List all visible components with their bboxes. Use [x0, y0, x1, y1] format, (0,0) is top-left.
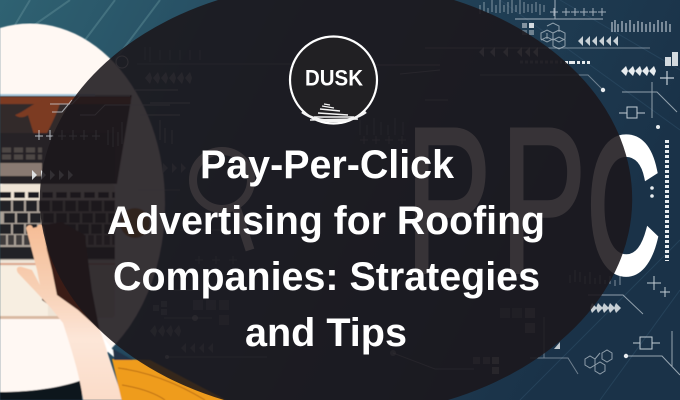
plus row upper left	[35, 130, 100, 140]
large PPC letters	[405, 84, 659, 319]
hexagons lower right	[585, 350, 612, 374]
chip top right	[619, 107, 645, 118]
hexagons	[541, 23, 565, 49]
dark lower corner	[0, 380, 82, 400]
title: and Tips	[245, 311, 407, 355]
logo: DUSK	[290, 36, 377, 124]
coffee cup	[120, 208, 150, 238]
plus row lower middle	[195, 256, 237, 264]
equaliser bars top right	[612, 20, 670, 32]
title: Pay-Per-Click	[200, 143, 454, 187]
shadowed hand under the ellipse	[42, 222, 100, 332]
title: Advertising for Roofing	[107, 199, 545, 243]
large PPC letters: P	[500, 84, 587, 319]
photo: white desk with laptop and hands	[0, 23, 245, 400]
connector line with dot	[425, 75, 603, 100]
chevrons	[578, 36, 618, 46]
crosses right	[647, 276, 670, 297]
desk circle	[0, 23, 165, 400]
large PPC letters: C	[588, 100, 659, 312]
chip lower right	[633, 337, 660, 349]
title	[107, 143, 545, 355]
dots	[601, 88, 605, 92]
magnifier icon	[193, 151, 251, 250]
vertical dotted bar	[665, 140, 669, 261]
squares	[522, 23, 527, 28]
brush stroke	[302, 104, 366, 121]
title: Companies: Strategies	[113, 255, 540, 299]
laptop keyboard	[0, 133, 115, 319]
typing hand at the top	[15, 100, 60, 147]
small tick chart	[570, 270, 620, 286]
orange sleeve	[112, 359, 245, 400]
logo: DUSK: DUSK	[305, 66, 363, 90]
hand and arm	[17, 224, 123, 400]
large PPC letters: P	[405, 84, 492, 319]
circuit lines upper left	[50, 90, 190, 115]
laptop screen	[0, 95, 132, 184]
plus row	[550, 8, 606, 16]
connector lines lower right	[588, 295, 643, 314]
